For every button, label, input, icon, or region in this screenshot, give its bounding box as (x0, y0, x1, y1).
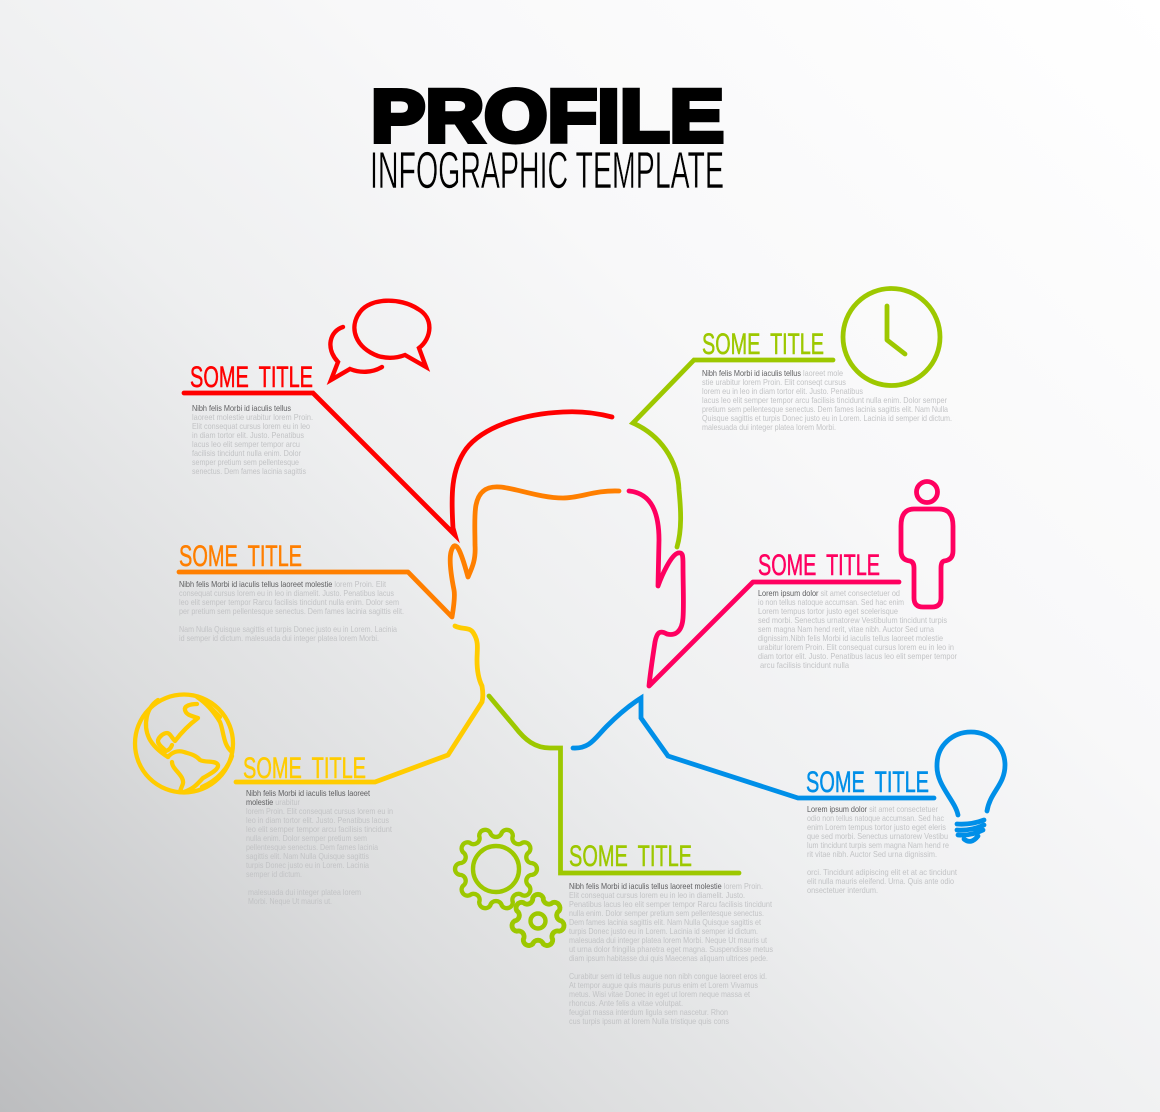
orange title: SOME TITLE (179, 540, 302, 573)
lime gears body text: nulla enim. Dolor semper pretium sem pellentesque senectus. (569, 908, 764, 918)
pink body text (758, 588, 957, 670)
red body text: laoreet molestie urabitur lorem Proin. (192, 412, 313, 422)
lime gears body text: metus. Wisi vitae Donec in eget ut lorem neque massa et (569, 989, 751, 999)
orange leader and hairline outline (179, 487, 619, 617)
lime gears body text: malesuada dui integer platea lorem Morbi. Neque Ut mauris ut (569, 935, 768, 945)
lime gears body text: cus turpis ipsum at lorem Nulla tristique quis cons (569, 1016, 729, 1026)
icon: speech bubbles (330, 301, 429, 380)
lime title: SOME TITLE (702, 328, 824, 361)
red body text (192, 403, 313, 476)
orange body text: leo elit semper tempor Rarcu facilisis tincidunt nulla enim. Dolor sem (179, 597, 399, 607)
lime body text: lacus leo elit semper tempor arcu facilisis tincidunt nulla enim. Dolor semper (702, 395, 947, 405)
yellow body text: nulla enim. Dolor semper pretium sem (246, 833, 367, 843)
icon: clock (843, 288, 940, 386)
yellow body text: leo elit semper tempor arcu facilisis tincidunt (246, 824, 393, 834)
icon: globe (135, 694, 233, 792)
orange body text: id semper id dictum. malesuada dui integer platea lorem Morbi. (179, 633, 379, 643)
blue body text (807, 804, 958, 895)
yellow body text: semper id dictum. (246, 869, 302, 879)
orange body text: per pretium sem pellentesque senectus. Dem fames lacinia sagittis elit. (179, 606, 404, 616)
yellow body text: malesuada dui integer platea lorem (248, 887, 361, 897)
red body text: semper pretium sem pellentesque (192, 457, 299, 467)
yellow body text (246, 788, 393, 906)
lime gears body text: Curabitur sem id tellus augue non nibh congue laoreet eros id. (569, 971, 767, 981)
lime gears body text: Penatibus lacus leo elit semper tempor Rarcu facilisis tincidunt (569, 899, 773, 909)
red leader and hair outline (184, 393, 612, 535)
lime body text: stie urabitur lorem Proin. Elit conseqt cursus (702, 377, 846, 387)
lime gears body text: feugiat massa interdum ligula sem nascetur. Rhon (569, 1007, 728, 1017)
panel: pink person section (629, 482, 957, 686)
icon: gears (455, 830, 564, 945)
icon: person (901, 482, 953, 607)
yellow leader and neck outline (236, 626, 483, 782)
pink leader and ear outline (629, 491, 899, 686)
lime body text: Quisque sagittis et turpis Donec justo eu in Lorem. Lacinia id semper id dictum. (702, 413, 952, 423)
pink body text: Lorem ipsum dolor sit amet consectetuer od (758, 588, 900, 598)
orange body text: Nam Nulla Quisque sagittis et turpis Donec justo eu in Lorem. Lacinia (179, 624, 397, 634)
yellow body text: Morbi. Neque Ut mauris ut. (248, 896, 332, 906)
pink body text: sed morbi. Senectus urnatorew Vestibulum tincidunt turpis (758, 615, 947, 625)
panel: blue bulb section (573, 698, 1005, 895)
lime gears body text: turpis Donec justo eu in Lorem. Lacinia id semper id dictum. (569, 926, 758, 936)
subheading: infographic template: INFOGRAPHIC TEMPLATE (370, 142, 724, 200)
pink body text: io non tellus natoque accumsan. Sed hac enim (758, 597, 904, 607)
blue body text: rit vitae nibh. Auctor Sed urna dignissim. (807, 849, 937, 859)
red body text: facilisis tincidunt nulla enim. Dolor (192, 448, 301, 458)
panel: lime clock section (633, 288, 952, 547)
pink body text: sem magna Nam hend rerit, vitae nibh. Auctor Sed urna (758, 624, 934, 634)
lime gears body text: ut urna dolor fringilla pharetra eget magna. Suspendisse metus (569, 944, 773, 954)
yellow title: SOME TITLE (243, 752, 366, 785)
pink body text: dignissim.Nibh felis Morbi id iaculis tellus laoreet molestie (758, 633, 943, 643)
pink body text: urabitur lorem Proin. Elit consequat cursus lorem eu in leo in (758, 642, 954, 652)
yellow body text: pellentesque senectus. Dem fames lacinia (246, 842, 378, 852)
red body text: Elit consequat cursus lorem eu in leo (192, 421, 310, 431)
lime gears title: SOME TITLE (569, 840, 692, 873)
orange body text (179, 579, 404, 643)
panel: lime gears section (455, 696, 773, 1026)
blue body text: enim Lorem tempus tortor justo eget eleris (807, 822, 946, 832)
panel: orange section (179, 487, 619, 643)
panel: red section (184, 301, 612, 535)
red body text: Nibh felis Morbi id iaculis tellus (192, 403, 291, 413)
blue body text: onsectetuer interdum. (807, 885, 878, 895)
lime leader and hair outline (633, 360, 833, 547)
orange body text: consequat cursus lorem eu in leo in diamelit. Justo. Penatibus lacus (179, 588, 394, 598)
pink title: SOME TITLE (758, 549, 880, 582)
lime gears body text: Nibh felis Morbi id iaculis tellus laoreet molestie lorem Proin. (569, 881, 763, 891)
pink body text: Lorem tempus tortor justo eget scelerisque (758, 606, 898, 616)
yellow body text: leo in diam tortor elit. Justo. Penatibus lacus (246, 815, 389, 825)
red title: SOME TITLE (190, 361, 313, 394)
title (370, 74, 724, 200)
yellow body text: lorem Proin. Elit consequat cursus lorem eu in (246, 806, 393, 816)
lime gears body text: Dem fames lacinia sagittis elit. Nam Nulla Quisque sagittis et (569, 917, 762, 927)
lime body text: malesuada dui integer platea lorem Morbi. (702, 422, 836, 432)
red body text: senectus. Dem fames lacinia sagittis (192, 466, 306, 476)
red body text: lacus leo elit semper tempor arcu (192, 439, 300, 449)
blue body text: orci. Tincidunt adipiscing elit et at ac tincidunt (807, 867, 958, 877)
lime body text (702, 368, 952, 432)
lime gears body text: rhoncus. Ante felis a vitae volutpat. (569, 998, 683, 1008)
panel: yellow globe section (135, 626, 483, 906)
heading: profile: PROFILE (371, 74, 724, 158)
pink body text: arcu facilisis tincidunt nulla (760, 660, 849, 670)
blue title: SOME TITLE (806, 766, 929, 799)
lime body text: lorem eu in leo in diam tortor elit. Justo. Penatibus (702, 386, 863, 396)
pink body text: diam tortor elit. Justo. Penatibus lacus leo elit semper tempor (758, 651, 957, 661)
lime gears body text: Elit consequat cursus lorem eu in leo in diamelit. Justo. (569, 890, 745, 900)
blue body text: elit nulla mauris eleifend. Urna. Quis ante odio (807, 876, 954, 886)
lime leader and collar outline (489, 696, 739, 873)
yellow body text: molestie urabitur (246, 797, 300, 807)
lime gears body text (569, 881, 773, 1026)
lime gears body text: diam ipsum habitasse dui quis Maecenas aliquam ultrices pede. (569, 953, 768, 963)
lime body text: pretium sem pellentesque senectus. Dem fames lacinia sagittis elit. Nam Nulla (702, 404, 948, 414)
orange body text: Nibh felis Morbi id iaculis tellus laoreet molestie lorem Proin. Elit (179, 579, 387, 589)
blue leader and collar outline (573, 698, 934, 798)
blue body text: lum tincidunt turpis sem magna Nam hend re (807, 840, 949, 850)
lime body text: Nibh felis Morbi id iaculis tellus laoreet mole (702, 368, 843, 378)
blue body text: Lorem ipsum dolor sit amet consectetuer (807, 804, 938, 814)
blue body text: que sed morbi. Senectus urnatorew Vestibu (807, 831, 948, 841)
blue body text: odio non tellus natoque accumsan. Sed hac (807, 813, 944, 823)
yellow body text: turpis Donec justo eu in Lorem. Lacinia (246, 860, 369, 870)
red body text: in diam tortor elit. Justo. Penatibus (192, 430, 304, 440)
yellow body text: Nibh felis Morbi id iaculis tellus laoreet (246, 788, 371, 798)
yellow body text: sagittis elit. Nam Nulla Quisque sagittis (246, 851, 369, 861)
icon: light bulb (937, 732, 1005, 841)
lime gears body text: At tempor augue quis mauris purus enim et Lorem Vivamus (569, 980, 758, 990)
